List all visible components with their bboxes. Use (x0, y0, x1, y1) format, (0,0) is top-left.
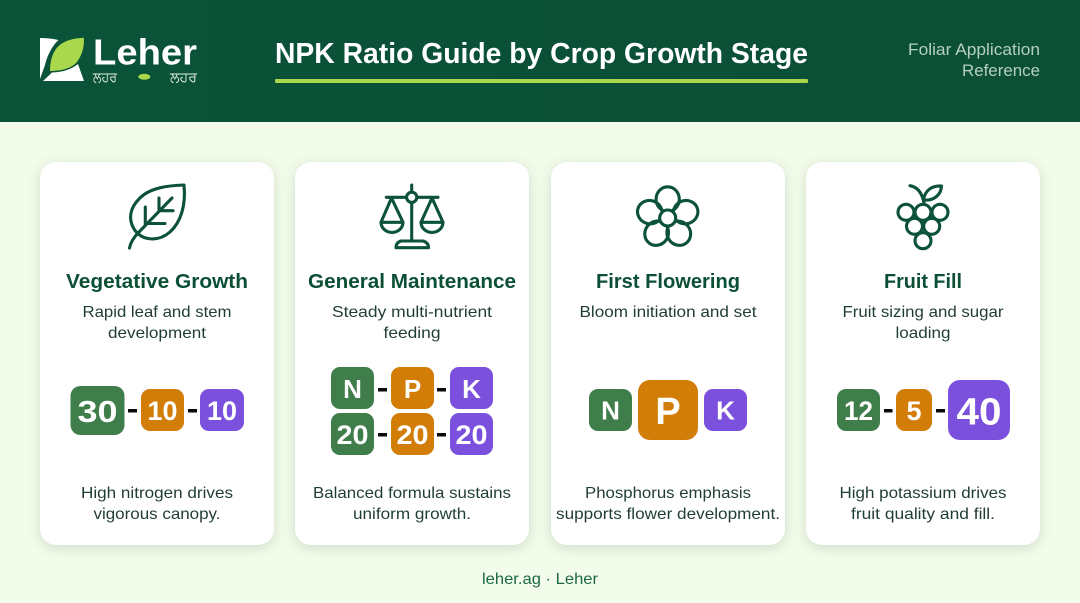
note: vigorous canopy. (94, 506, 220, 523)
NPK ratio 20-20-20: N (343, 374, 362, 404)
note: Phosphorus emphasis (585, 485, 751, 502)
NPK ratio 30-10-10: 10 (148, 396, 178, 426)
header subtitle (908, 40, 1040, 80)
description: feeding (384, 325, 440, 342)
description: Rapid leaf and stem (82, 304, 232, 321)
icon: grapes (898, 186, 948, 249)
NPK emphasis on P: N (601, 396, 620, 426)
description: Fruit sizing and sugar (842, 304, 1004, 321)
description: Steady multi-nutrient (332, 304, 493, 321)
logo mark (40, 38, 84, 81)
NPK emphasis on P: K (716, 396, 735, 426)
logo tagline: ਲਹਰ (169, 69, 197, 85)
note: High nitrogen drives (81, 485, 233, 502)
panel: First Flowering (551, 162, 785, 545)
note (840, 485, 1006, 523)
NPK ratio 30-10-10: 10 (207, 396, 237, 426)
header subtitle: Reference (962, 61, 1040, 80)
NPK emphasis on P: P (655, 391, 681, 433)
note (313, 485, 511, 523)
description: Bloom initiation and set (580, 304, 757, 321)
NPK emphasis on P (589, 380, 747, 440)
note: fruit quality and fill. (851, 506, 995, 523)
logo tagline (92, 69, 197, 85)
NPK ratio 12-5-40 (837, 380, 1010, 440)
icon: balance scale (381, 185, 443, 248)
note: uniform growth. (353, 506, 471, 523)
title underline (275, 79, 808, 83)
title: NPK Ratio Guide by Crop Growth Stage (275, 38, 808, 70)
panel: Vegetative Growth (40, 162, 274, 545)
NPK ratio 20-20-20: K (462, 374, 481, 404)
description: loading (896, 325, 950, 342)
logo (40, 32, 197, 85)
icon: flower (634, 187, 701, 250)
icon: leaf (130, 185, 184, 248)
heading: General Maintenance (308, 270, 516, 293)
heading: Vegetative Growth (66, 270, 248, 293)
description: development (108, 325, 207, 342)
note: High potassium drives (840, 485, 1006, 502)
note (81, 485, 233, 523)
NPK ratio 30-10-10 (70, 386, 244, 435)
NPK ratio 20-20-20: P (404, 374, 421, 404)
panel: General Maintenance (295, 162, 529, 545)
footer: leher.ag · Leher (482, 571, 599, 588)
NPK ratio 12-5-40: 12 (844, 396, 873, 426)
NPK ratio 20-20-20 (331, 367, 493, 455)
description (842, 304, 1004, 342)
heading: First Flowering (596, 270, 740, 293)
note (556, 485, 780, 523)
heading: Fruit Fill (884, 270, 962, 293)
header subtitle: Foliar Application (908, 40, 1040, 59)
logo wordmark: Leher (93, 32, 197, 72)
NPK ratio 12-5-40: 5 (906, 396, 922, 426)
note: supports flower development. (556, 506, 780, 523)
panel: Fruit Fill (806, 162, 1040, 545)
description (82, 304, 232, 342)
NPK ratio 30-10-10: 30 (78, 394, 118, 429)
description (332, 304, 493, 342)
NPK ratio 20-20-20: 20 (336, 420, 368, 450)
NPK ratio 12-5-40: 40 (956, 392, 1002, 434)
NPK ratio 20-20-20: 20 (396, 420, 428, 450)
note: Balanced formula sustains (313, 485, 511, 502)
NPK ratio 20-20-20: 20 (456, 420, 488, 450)
header band (0, 0, 1080, 122)
logo tagline: ਲਹਰ (92, 69, 117, 85)
